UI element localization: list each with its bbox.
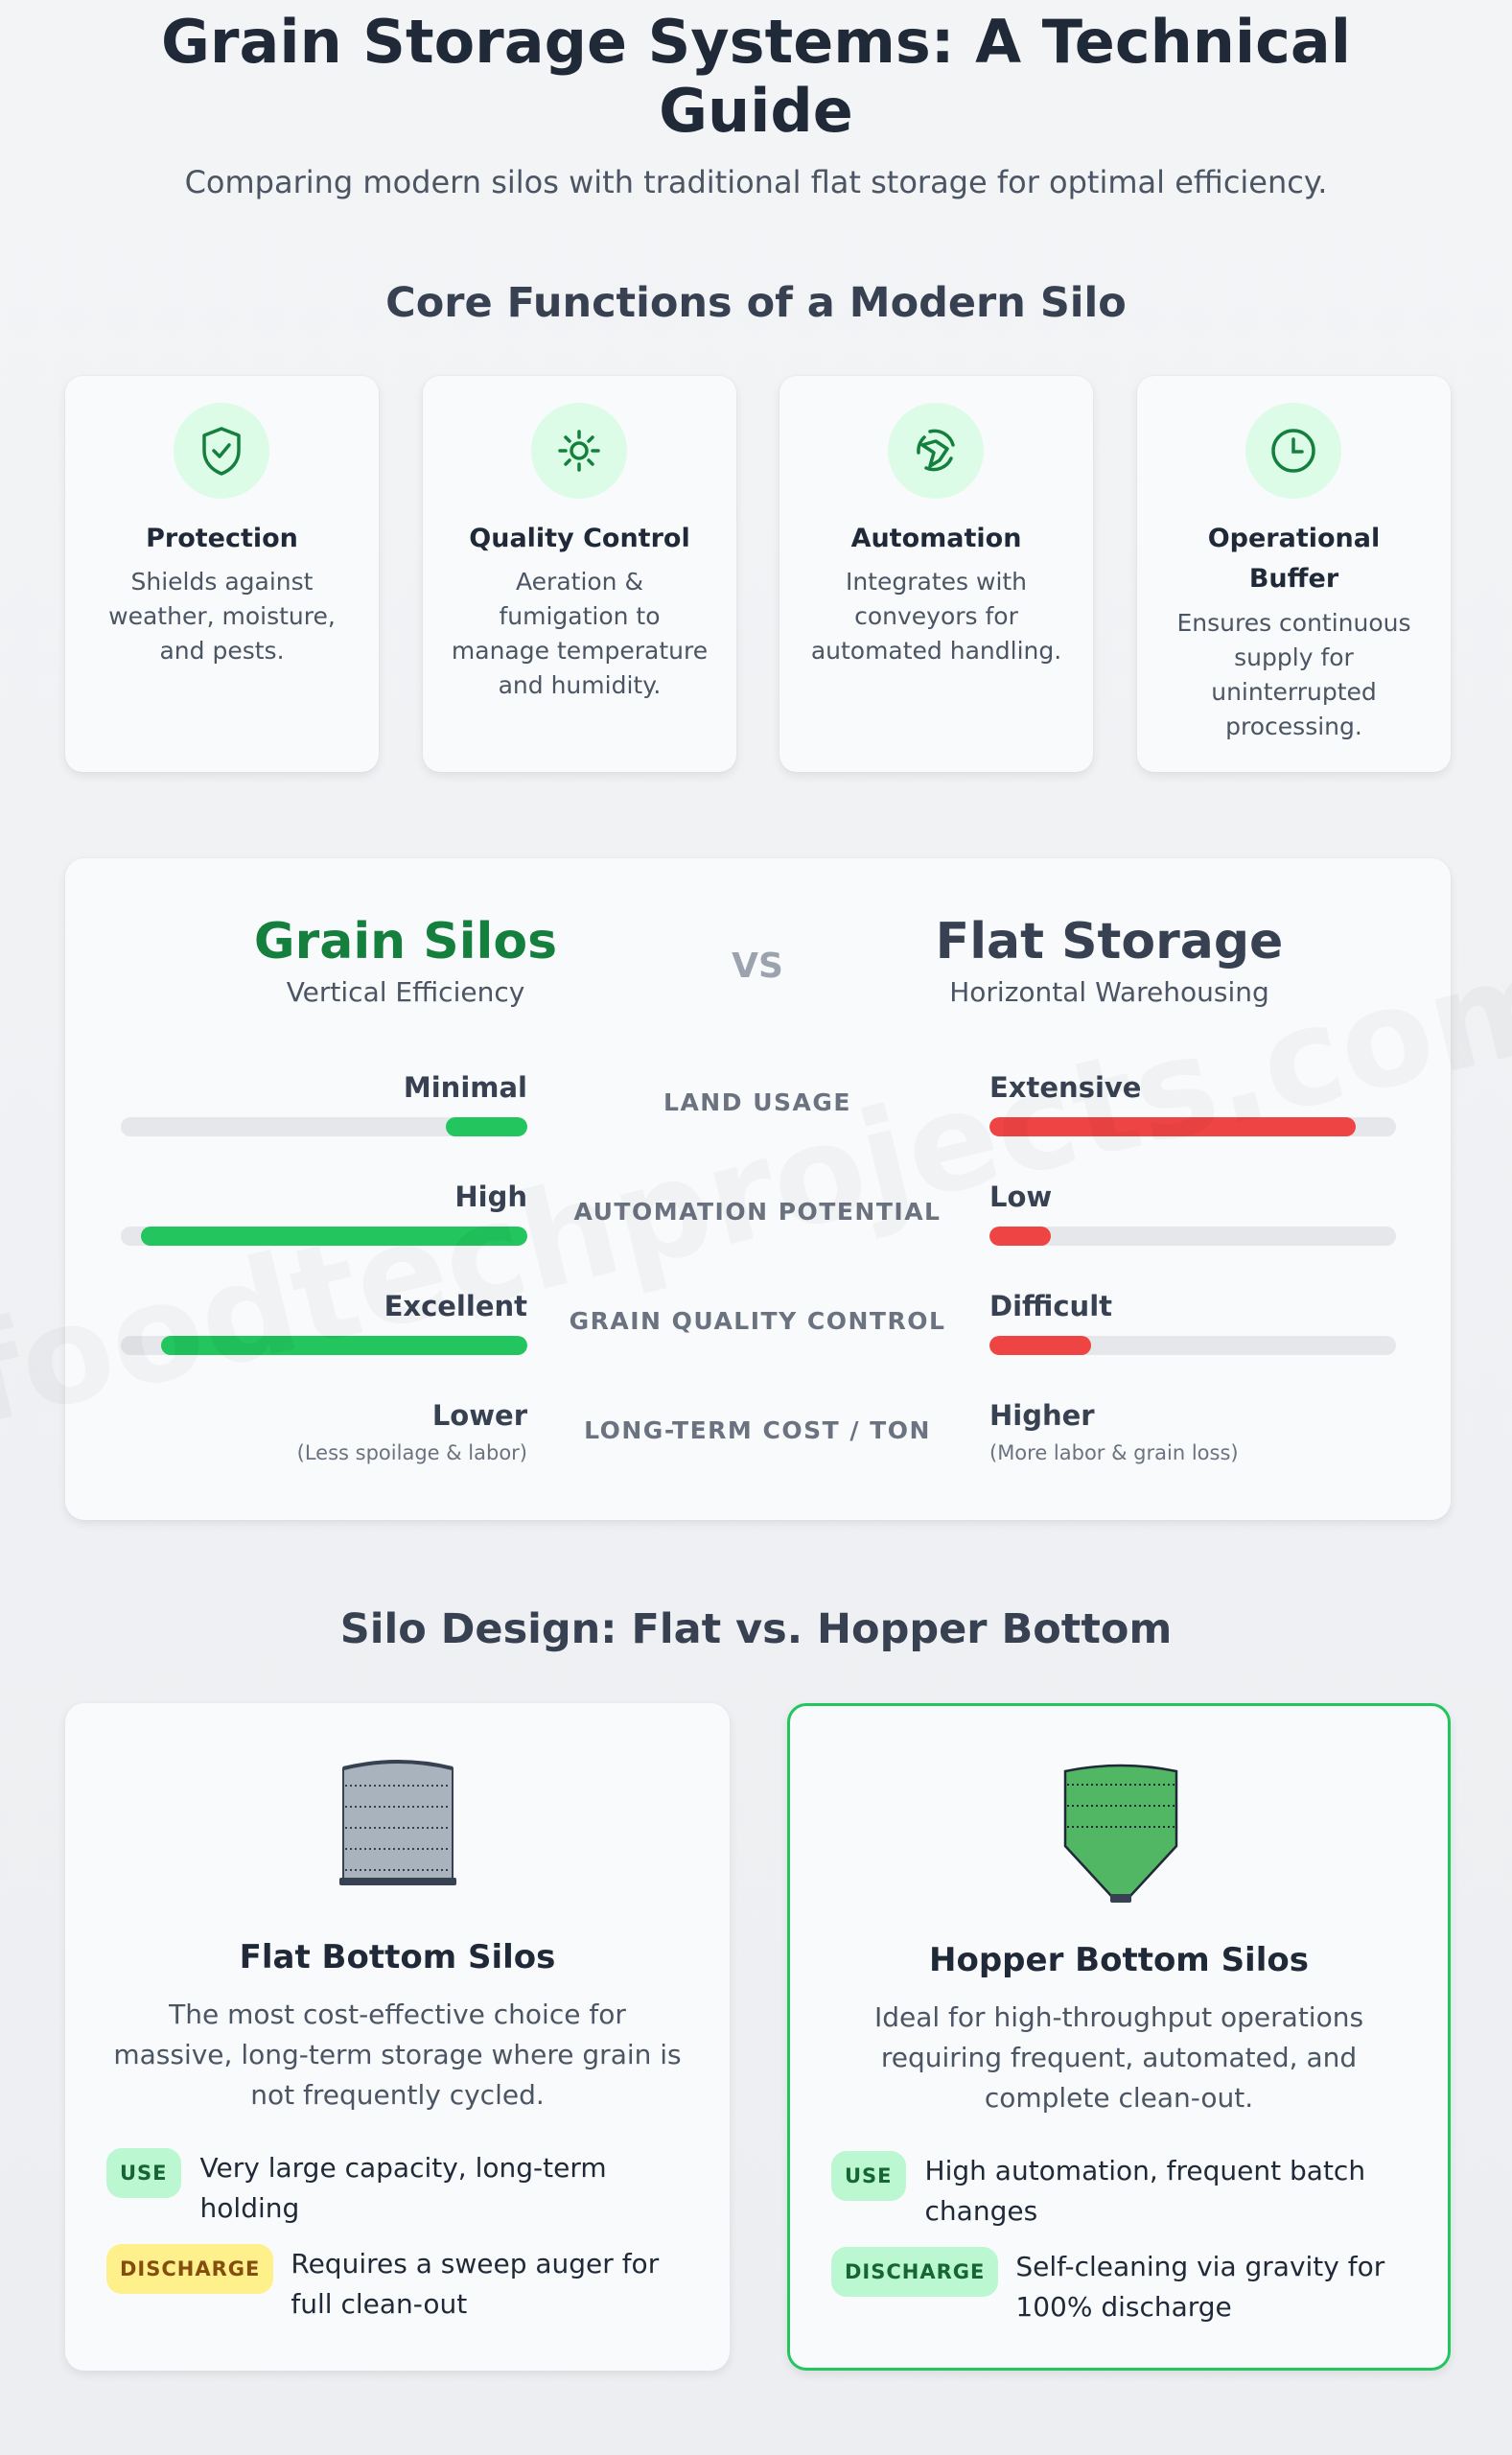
panel: comparison	[65, 858, 1451, 1520]
row: automation potential: AUTOMATION POTENTIAL	[574, 1198, 941, 1226]
panel: quality control: fumigation to	[499, 602, 661, 630]
panel: flat bottom silos	[65, 1703, 730, 2371]
row: grain quality control: GRAIN QUALITY CONTROL	[570, 1307, 945, 1335]
desc: hopper bottom	[874, 2001, 1363, 2114]
icon: hopper silo	[1064, 1765, 1177, 1903]
panel: automation	[779, 376, 1093, 772]
item: use: changes	[925, 2195, 1037, 2227]
item: discharge: Self-cleaning via gravity for	[1015, 2251, 1384, 2282]
desc: hopper bottom: Ideal for high-throughput operations	[874, 2001, 1363, 2033]
item: discharge: DISCHARGE	[120, 2257, 260, 2280]
row: land usage	[121, 1071, 1396, 1136]
item: discharge	[106, 2244, 660, 2320]
panel: quality control: and humidity.	[499, 671, 661, 699]
header: flat storage: Flat Storage	[936, 913, 1283, 970]
panel: automation: conveyors for	[854, 602, 1018, 630]
title: Grain Storage Systems: A Technical	[161, 7, 1351, 77]
row: long-term cost: (More labor & grain loss)	[989, 1441, 1239, 1464]
text: automation: Automation	[851, 524, 1021, 553]
vs: VS	[732, 947, 783, 986]
desc: flat bottom: not frequently cycled.	[250, 2079, 545, 2111]
desc: flat bottom: The most cost-effective choice for	[169, 1999, 626, 2030]
panel: protection: weather, moisture,	[108, 602, 336, 630]
text: operational buffer: Operational	[1208, 524, 1380, 553]
panel: protection	[65, 376, 379, 772]
row: grain quality control	[121, 1290, 1396, 1355]
panel: operational buffer: uninterrupted	[1211, 678, 1377, 706]
row: grain quality control: Excellent	[384, 1290, 527, 1322]
heading: silo design: Silo Design: Flat vs. Hopper Bottom	[340, 1605, 1172, 1653]
item: discharge: full clean-out	[291, 2288, 467, 2320]
desc: flat bottom: massive, long-term storage where grain is	[113, 2039, 682, 2070]
desc: flat bottom	[113, 1999, 682, 2111]
row: long-term cost: LONG-TERM COST / TON	[584, 1416, 931, 1444]
text: operational buffer: Buffer	[1249, 564, 1338, 594]
row: grain quality control: Difficult	[989, 1290, 1112, 1322]
item: use: High automation, frequent batch	[925, 2155, 1365, 2186]
row: long-term cost: Higher	[989, 1399, 1095, 1432]
row: land usage: LAND USAGE	[663, 1088, 851, 1116]
item: discharge	[831, 2247, 1384, 2323]
item: use: holding	[200, 2192, 299, 2224]
item: use: Very large capacity, long-term	[200, 2152, 607, 2184]
panel: automation: Integrates with	[846, 568, 1027, 596]
header: grain silos	[254, 913, 557, 1008]
text: protection: Protection	[146, 524, 298, 553]
desc: hopper bottom: complete clean-out.	[985, 2082, 1253, 2114]
panel: quality control: Aeration &	[516, 568, 643, 596]
item: use	[106, 2148, 607, 2224]
desc: hopper bottom: requiring frequent, automated, and	[881, 2042, 1357, 2073]
row: land usage: Extensive	[989, 1071, 1141, 1104]
icon: shield	[174, 403, 269, 499]
item: discharge: Requires a sweep auger for	[291, 2248, 659, 2280]
item: use	[831, 2151, 1365, 2227]
row: long-term cost	[297, 1399, 1239, 1464]
heading: core functions: Core Functions of a Modern Silo	[385, 279, 1127, 327]
row: land usage: Minimal	[404, 1071, 527, 1104]
icon: flat silo	[339, 1760, 456, 1885]
header: grain silos: Vertical Efficiency	[287, 976, 524, 1008]
text: operational buffer	[1208, 524, 1380, 594]
panel: quality control: manage temperature	[452, 637, 708, 665]
panel: protection: Shields against	[131, 568, 313, 596]
title: flat bottom: Flat Bottom Silos	[240, 1938, 555, 1976]
item: use: USE	[120, 2162, 168, 2185]
icon: clock	[1245, 403, 1341, 499]
icon: cycle	[888, 403, 984, 499]
panel: operational buffer: Ensures continuous	[1176, 609, 1411, 637]
panel: automation: automated handling.	[811, 637, 1061, 665]
row: automation potential: Low	[989, 1181, 1052, 1213]
panel: protection: and pests.	[159, 637, 285, 665]
panel: quality control	[423, 376, 736, 772]
row: long-term cost: Lower	[432, 1399, 527, 1432]
row: automation potential	[121, 1181, 1396, 1246]
row: long-term cost: (Less spoilage & labor)	[297, 1441, 527, 1464]
panel: operational buffer	[1137, 376, 1451, 772]
item: use: USE	[845, 2164, 893, 2187]
panel: operational buffer: processing.	[1225, 713, 1362, 740]
title	[161, 7, 1351, 146]
title: Guide	[659, 76, 853, 146]
header: grain silos: Grain Silos	[254, 913, 557, 970]
title: hopper bottom: Hopper Bottom Silos	[929, 1941, 1309, 1979]
panel: hopper bottom silos	[787, 1703, 1451, 2371]
item: discharge: DISCHARGE	[845, 2260, 985, 2283]
row: automation potential: High	[454, 1181, 527, 1213]
header: flat storage	[936, 913, 1283, 1008]
item: discharge: 100% discharge	[1015, 2291, 1232, 2323]
header: flat storage: Horizontal Warehousing	[949, 976, 1269, 1008]
text: quality control: Quality Control	[469, 524, 690, 553]
icon: sun	[531, 403, 627, 499]
subtitle: Comparing modern silos with traditional flat storage for optimal efficiency.	[185, 164, 1327, 200]
panel: operational buffer: supply for	[1234, 643, 1354, 671]
